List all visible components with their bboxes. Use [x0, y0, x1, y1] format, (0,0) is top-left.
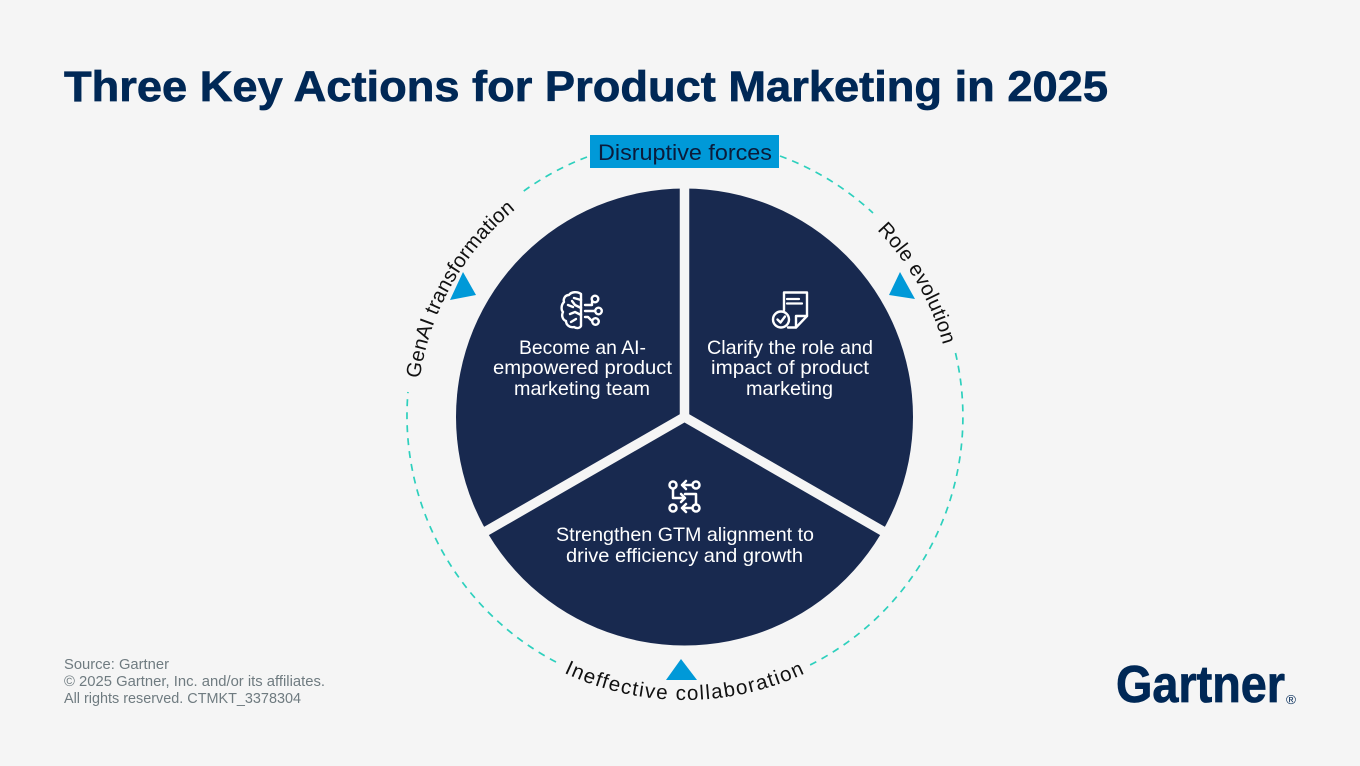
text: Become an AI-empowered product marketing team: empowered product: [493, 357, 673, 379]
title: Three Key Actions for Product Marketing in 2025: [64, 63, 1108, 111]
label: Disruptive forces: Disruptive forces: [598, 140, 772, 165]
source and copyright: © 2025 Gartner, Inc. and/or its affiliates.: [64, 674, 325, 690]
text: Become an AI-empowered product marketing team: Become an AI-: [519, 337, 646, 359]
text: Strengthen GTM alignment to drive efficiency and growth: drive efficiency and growth: [566, 545, 803, 567]
label: Role evolution: Role evolution: [878, 222, 953, 344]
label: GenAI transformation: GenAI transformation: [406, 203, 514, 376]
icon: AI brain: [562, 292, 602, 328]
arrow: bottom triangle: [666, 659, 697, 680]
label: Ineffective collaboration: Ineffective collaboration: [566, 660, 804, 700]
source and copyright: Source: Gartner: [64, 657, 169, 673]
text: Strengthen GTM alignment to drive efficiency and growth: Strengthen GTM alignment to: [556, 524, 814, 546]
logo: Gartner: ®: [1286, 692, 1296, 707]
pie: three actions: [456, 180, 913, 646]
icon: GTM alignment flow: [670, 481, 700, 512]
arrow: left triangle: [450, 272, 476, 300]
dashed cycle ring: [407, 156, 963, 665]
text: Clarify the role and impact of product marketing: Clarify the role and: [707, 337, 873, 359]
text: Clarify the role and impact of product marketing: impact of product: [711, 357, 870, 379]
source and copyright: All rights reserved. CTMKT_3378304: [64, 691, 301, 707]
text: Become an AI-empowered product marketing team: marketing team: [514, 378, 650, 400]
label: Disruptive forces: [590, 135, 779, 168]
text: Clarify the role and impact of product marketing: marketing: [746, 378, 833, 400]
logo: Gartner: Gartner: [1116, 656, 1285, 714]
icon: document with check: [773, 292, 807, 328]
arrow: right triangle: [889, 272, 915, 299]
